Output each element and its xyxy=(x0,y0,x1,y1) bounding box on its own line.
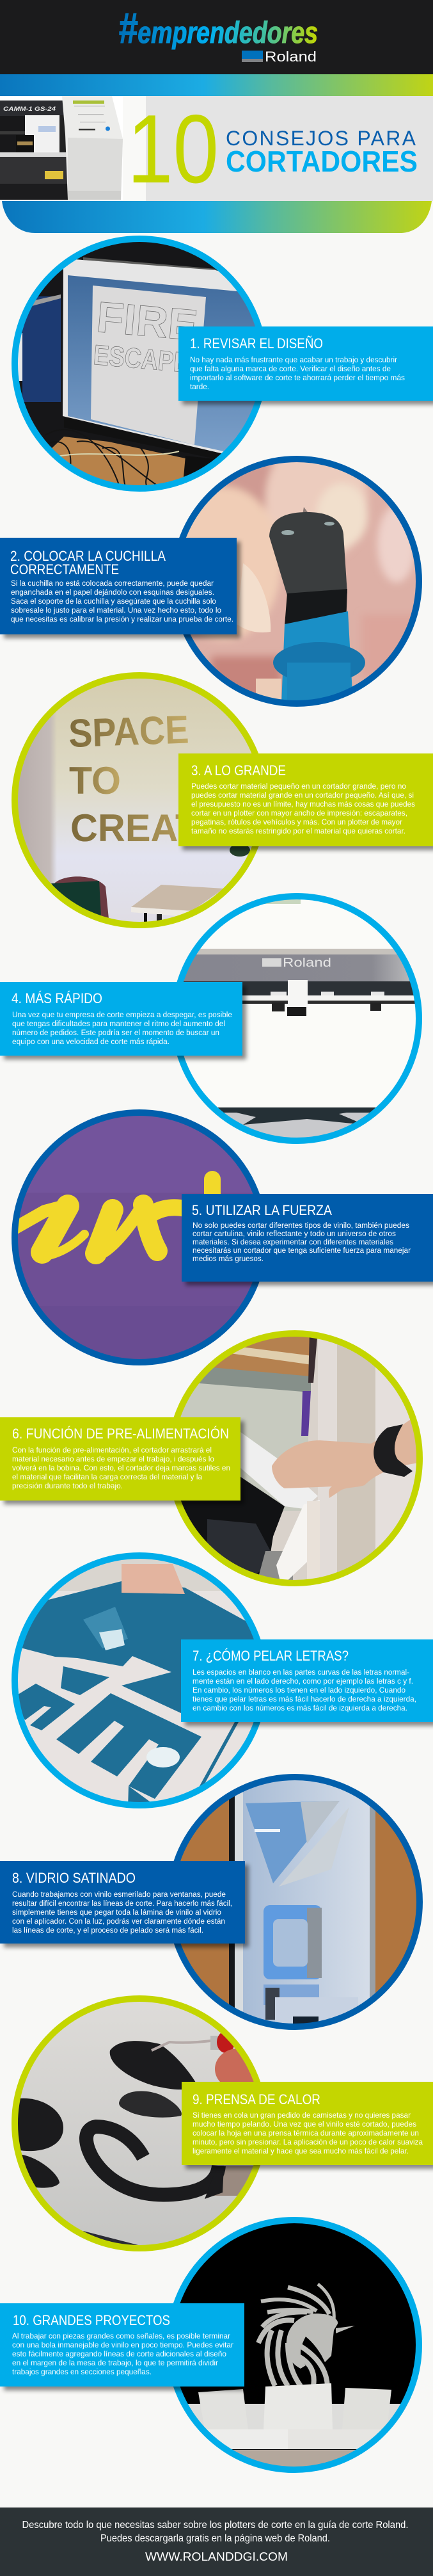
body text: precisión durante todo el trabajo. xyxy=(12,1481,123,1490)
body text: En cambio, los números los tienen en el lado izquierdo, Cuando xyxy=(193,1686,405,1695)
body text: número de pedidos. Este podría ser el momento de buscar un xyxy=(12,1028,219,1037)
tip 3 xyxy=(11,672,433,929)
photo: monitor with design: FIRE xyxy=(95,293,200,350)
photo: wall lettering: TO xyxy=(69,759,121,802)
body text: Cuando trabajamos con vinilo esmerilado para ventanas, puede xyxy=(12,1890,226,1899)
heading: 2. COLOCAR LA CUCHILLA xyxy=(10,548,166,564)
body text: en cambio con los números es más fácil de izquierda a derecha. xyxy=(193,1703,407,1712)
body text: Con la función de pre-alimentación, el cortador arrastrará el xyxy=(12,1445,212,1454)
photo: hand pressing cutter panel xyxy=(180,1337,416,1580)
body text xyxy=(191,782,415,835)
body text xyxy=(193,2111,423,2155)
panel: utilizar la fuerza xyxy=(182,1194,433,1282)
photo: weeding black vinyl xyxy=(18,2002,253,2245)
body text: Saca el soporte de la cuchilla y asegúrate que la cuchilla solo xyxy=(11,597,216,606)
body text: las líneas de corte, y el proceso de pelado será más fácil. xyxy=(12,1926,203,1935)
body text xyxy=(11,579,233,624)
body text: esto fácilmente agregando líneas de corte adicionales al diseño xyxy=(12,2349,226,2358)
header: hashtag logo and Roland brand xyxy=(0,0,433,74)
body text: material necesario antes de empezar el trabajo, i después lo xyxy=(12,1454,214,1463)
body text: minuto, pero sin presionar. La aplicación de un poco de calor suaviza xyxy=(193,2137,423,2146)
panel: cómo pelar letras xyxy=(181,1639,433,1722)
panel: función de pre-alimentación xyxy=(0,1417,240,1501)
big number 10: 10 xyxy=(127,95,219,204)
tip 7 xyxy=(11,1552,433,1808)
heading: 10. GRANDES PROYECTOS xyxy=(13,2312,170,2328)
body text: enganchada en el papel dejándolo con esquinas desiguales. xyxy=(11,588,214,597)
panel: vidrio satinado xyxy=(0,1861,245,1944)
panel: prensa de calor xyxy=(182,2082,433,2165)
heading: 6. FUNCIÓN DE PRE-ALIMENTACIÓN xyxy=(12,1426,229,1442)
photo: yellow flock on purple shirt xyxy=(18,1116,253,1359)
body text: Puedes cortar material pequeño en un cortador grande, pero no xyxy=(191,782,406,791)
photo: unicorn wall decal and sofa xyxy=(180,2223,416,2467)
illustration: cutter machine xyxy=(0,96,123,200)
photo: peeling teal vinyl xyxy=(18,1559,254,1802)
body text: en el margen de la mesa de trabajo, lo que te permitirá dividir xyxy=(12,2358,218,2367)
photo: frosted glass vinyl xyxy=(180,1780,416,2024)
photo: wall lettering: SPACE xyxy=(68,707,189,756)
title line 1: CONSEJOS PARA xyxy=(226,127,416,150)
tip 4 xyxy=(0,893,422,1146)
heading: 4. MÁS RÁPIDO xyxy=(12,990,102,1006)
body text: mucho tiempo pelando. Una vez que el vinilo esté cortado, puedes xyxy=(193,2120,416,2129)
heading: 1. REVISAR EL DISEÑO xyxy=(190,335,323,351)
body text: importarlo al software de corte te ahorrará perder el tiempo más xyxy=(190,373,405,382)
photo: Roland plotter xyxy=(184,899,415,1138)
panel: grandes proyectos xyxy=(0,2303,244,2387)
tip 9 xyxy=(11,1995,433,2251)
photo: cutting blade holder xyxy=(186,462,416,700)
Roland logo: Roland xyxy=(265,49,317,65)
title banner xyxy=(0,95,433,204)
body text: colocar la hoja en una prensa térmica durante aproximadamente un xyxy=(193,2129,419,2137)
photo: wall lettering xyxy=(18,679,252,922)
body text: con el aplicador. Con la luz, podrás ver claramente dónde están xyxy=(12,1917,225,1926)
body text: tamaño no estarás restringido por el material que quieras cortar. xyxy=(191,826,405,835)
body text xyxy=(193,1668,416,1712)
heading xyxy=(10,548,166,577)
body text xyxy=(12,2331,233,2376)
body text: No hay nada más frustrante que acabar un trabajo y descubrir xyxy=(190,355,397,364)
title line 2: CORTADORES xyxy=(226,145,418,178)
tip 10 xyxy=(0,2217,423,2475)
bottom rounded gradient band xyxy=(2,201,432,233)
photo: wall lettering: CREATE xyxy=(70,807,224,849)
panel: colocar la cuchilla xyxy=(0,538,237,634)
photo: monitor with design: ESCAPE xyxy=(92,339,191,379)
body text: Una vez que tu empresa de corte empieza a despegar, es posible xyxy=(12,1010,232,1019)
heading: 7. ¿CÓMO PELAR LETRAS? xyxy=(193,1648,349,1664)
body text: Al trabajar con piezas grandes como señales, es posible terminar xyxy=(12,2331,230,2340)
body text: puedes cortar material grande en un cortador pequeño. Así que, si xyxy=(191,791,414,800)
panel: revisar el diseño xyxy=(178,326,433,401)
body text xyxy=(12,1445,230,1490)
body text: que tengas dificultades para mantener el ritmo del aumento del xyxy=(12,1019,225,1028)
body text: No solo puedes cortar diferentes tipos de vinilo, también puedes xyxy=(193,1221,409,1230)
tip 2 xyxy=(0,435,422,711)
body text: cortar en un plotter con mayor ancho de impresión: escaparates, xyxy=(191,809,407,817)
illustration: cutter machine: CAMM-1 GS-24 xyxy=(3,106,56,113)
panel: más rápido xyxy=(0,982,242,1056)
body text: pegatinas, rótulos de vehículos y más. Con un plotter de mayor xyxy=(191,817,402,826)
body text: trabajos grandes en secciones pequeñas. xyxy=(12,2367,152,2376)
body text: volverá en la bobina. Con esto, el cortador deja marcas sutiles en xyxy=(12,1463,230,1472)
body text: que necesitas es calibrar la presión y realizar una prueba de corte. xyxy=(11,615,233,624)
body text: cortar cartulina, vinilo reflectante y todo un universo de otros xyxy=(193,1229,396,1238)
footer website: WWW.ROLANDDGI.COM xyxy=(145,2550,288,2563)
body text xyxy=(193,1221,411,1263)
body text: resultar difícil encontrar las líneas de corte. Para hacerlo más fácil, xyxy=(12,1899,232,1908)
heading: 9. PRENSA DE CALOR xyxy=(193,2091,320,2107)
footer message xyxy=(22,2520,408,2544)
footer message: Puedes descargarla gratis en la página web de Roland. xyxy=(100,2533,330,2544)
footer xyxy=(0,2508,433,2576)
top gradient band xyxy=(0,74,433,96)
panel: a lo grande xyxy=(178,753,433,846)
body text: el presupuesto no es un límite, hay muchas más cosas que puedes xyxy=(191,800,415,809)
body text: necesitarás un cortador que tenga suficiente fuerza para manejar xyxy=(193,1246,411,1255)
body text xyxy=(12,1890,232,1935)
heading: 5. UTILIZAR LA FUERZA xyxy=(192,1202,332,1218)
body text: Si tienes en cola un gran pedido de camisetas y no quieres pasar xyxy=(193,2111,411,2120)
hashtag logo: #emprendedores xyxy=(118,4,318,52)
tip 8 xyxy=(0,1773,423,2033)
body text: el material que facilitan la carga correcta del material y la xyxy=(12,1472,202,1481)
photo: Roland plotter: Roland xyxy=(283,956,331,970)
body text: tarde. xyxy=(190,382,209,391)
body text: tienes que pelar letras es más fácil hacerlo de derecha a izquierda, xyxy=(193,1695,416,1703)
footer message: Descubre todo lo que necesitas saber sobre los plotters de corte en la guía de corte Roland. xyxy=(22,2520,408,2531)
Roland logo xyxy=(242,49,317,65)
body text: ligeramente el material y hace que sea mucho más fácil de pelar. xyxy=(193,2146,409,2155)
tip 6 xyxy=(0,1330,423,1586)
heading: 3. A LO GRANDE xyxy=(191,762,286,778)
body text: medios más gruesos. xyxy=(193,1254,264,1263)
body text xyxy=(12,1010,232,1046)
body text: Si la cuchilla no está colocada correctamente, puede quedar xyxy=(11,579,214,588)
photo: monitor with design xyxy=(18,242,255,485)
heading: 8. VIDRIO SATINADO xyxy=(12,1870,136,1886)
body text: simplemente tienes que pegar toda la lámina de vinilo al vidrio xyxy=(12,1908,221,1917)
body text xyxy=(190,355,405,391)
body text: sobresale lo justo para el material. Una vez hecho esto, todo lo xyxy=(11,606,221,615)
body text: mente están en el lado derecho, como por ejemplo las letras c y f. xyxy=(193,1677,413,1686)
body text: materiales. Si desea experimentar con diferentes materiales xyxy=(193,1237,393,1246)
body text: Les espacios en blanco en las partes curvas de las letras normal- xyxy=(193,1668,409,1677)
tip 5 xyxy=(11,1109,433,1367)
tip 1 xyxy=(11,236,433,493)
body text: que falta alguna marca de corte. Verificar el diseño antes de xyxy=(190,364,391,373)
heading: CORRECTAMENTE xyxy=(10,561,119,577)
body text: con una bola inmanejable de vinilo en poco tiempo. Puedes evitar xyxy=(12,2340,233,2349)
body text: equipo con una velocidad de corte más rápida. xyxy=(12,1037,169,1046)
